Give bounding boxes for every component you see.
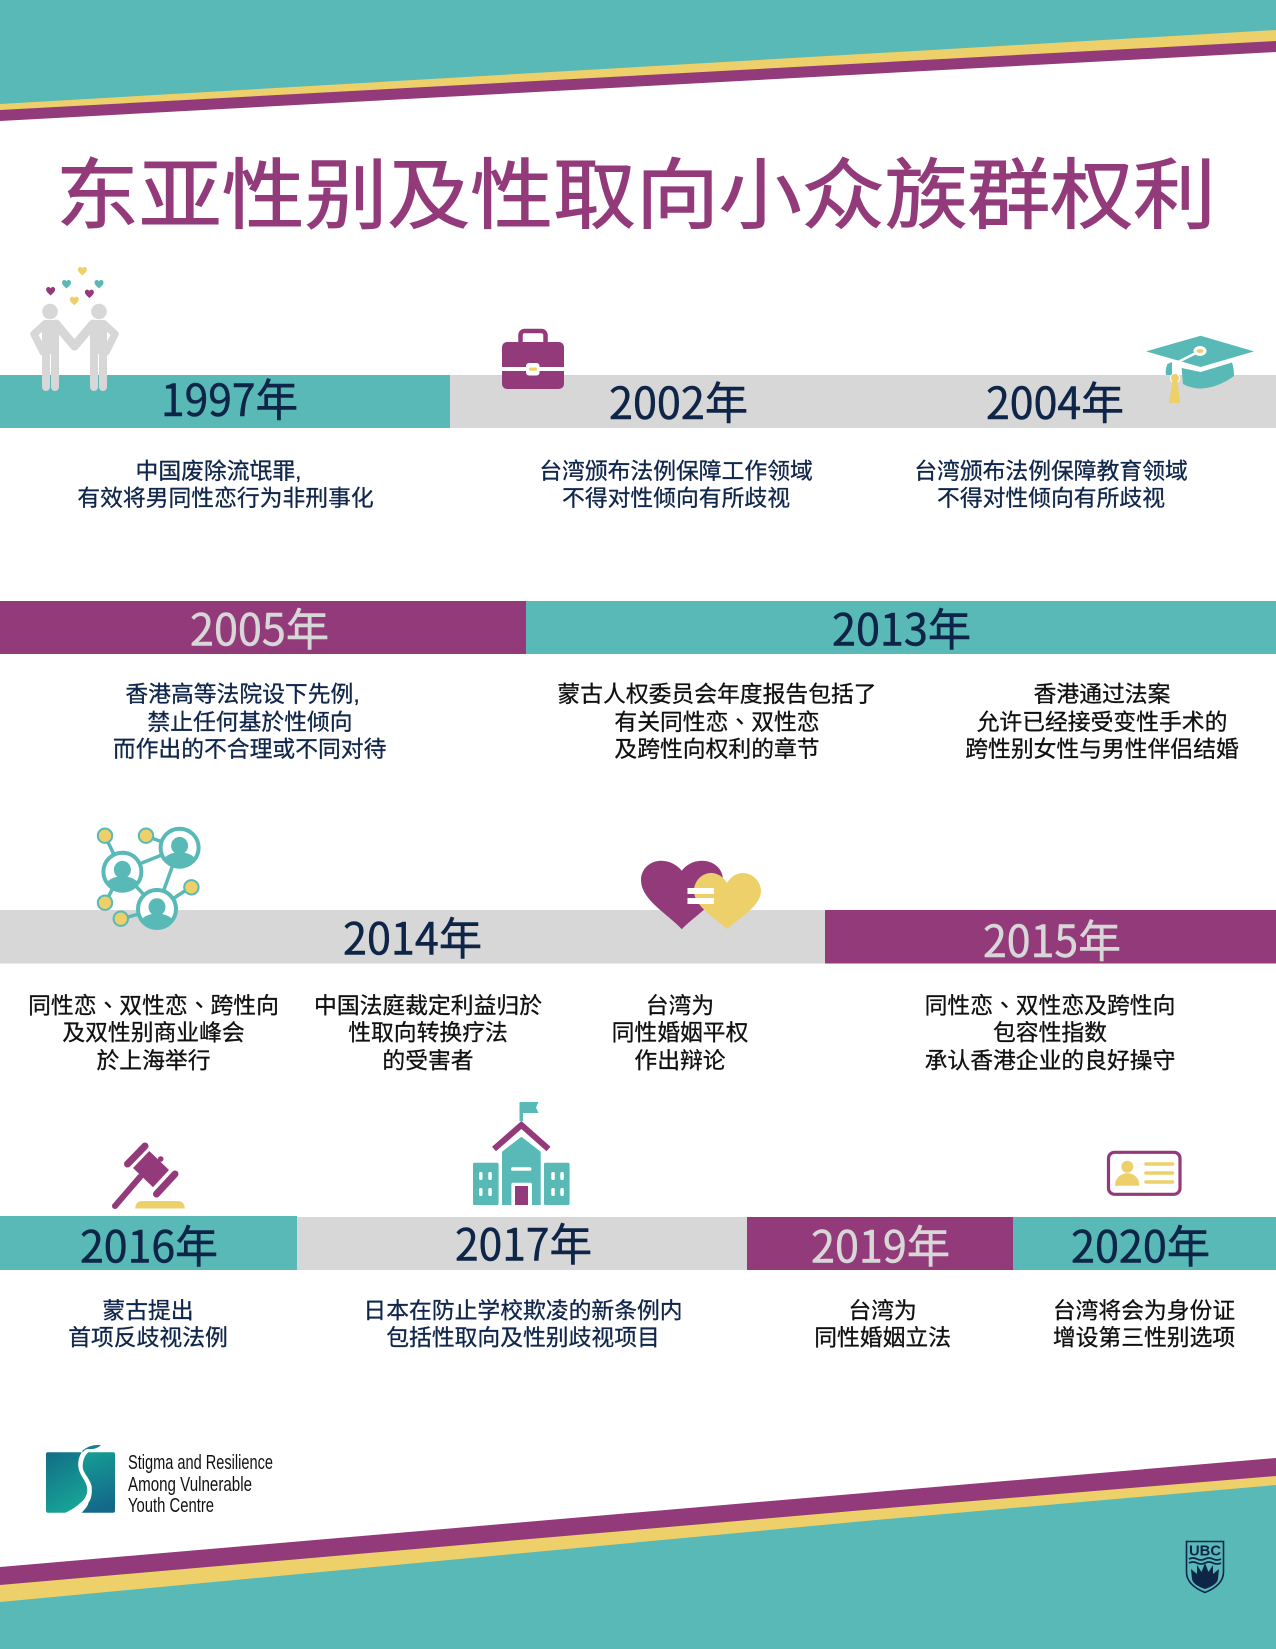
logo text: centre name: Youth Centre [128, 1495, 214, 1517]
year: 2015: 2015年 [983, 905, 1121, 970]
year: 2004: 2004年 [986, 367, 1124, 432]
text: 1997 event: 中国废除流氓罪, [136, 458, 301, 484]
text: 1997 event: 有效将男同性恋行为非刑事化 [77, 485, 374, 511]
year: 2016: 2016年 [80, 1210, 218, 1276]
text: 1997 event [77, 458, 374, 511]
text: 2013 Mongolia event: 及跨性向权利的章节 [614, 736, 820, 762]
logo: Stigma and Resilience mark [46, 1445, 115, 1513]
text: 2016 event: 首项反歧视法例 [68, 1324, 228, 1350]
text: 2014 Taiwan event: 同性婚姻平权 [612, 1020, 749, 1046]
text: 2004 event [914, 458, 1188, 511]
text: 2016 event: 蒙古提出 [102, 1298, 194, 1324]
text: 2002 event [539, 458, 813, 511]
text: 2015 event: 承认香港企业的良好操守 [925, 1048, 1175, 1074]
text: 2017 event: 包括性取向及性别歧视项目 [386, 1324, 660, 1350]
text: 2014 summit event [28, 988, 279, 1074]
logo: UBC shield: UBC [1189, 1542, 1221, 1560]
text: 2015 event: 包容性指数 [993, 1020, 1107, 1046]
text: 2017 event [363, 1298, 683, 1350]
text: 2019 event [814, 1298, 951, 1350]
text: 2004 event: 台湾颁布法例保障教育领域 [914, 458, 1188, 484]
text: 2014 Taiwan event: 作出辩论 [634, 1048, 726, 1074]
text: 2015 event [925, 988, 1175, 1074]
text: 2013 Hong Kong event: 香港通过法案 [1034, 681, 1171, 707]
text: 2019 event: 同性婚姻立法 [814, 1324, 951, 1350]
text: 2004 event: 不得对性倾向有所歧视 [937, 485, 1165, 511]
year: 2014: 2014年 [343, 902, 482, 968]
text: 2019 event: 台湾为 [848, 1298, 917, 1324]
logo: UBC shield [1186, 1542, 1224, 1592]
logo text: centre name: Stigma and Resilience [128, 1452, 273, 1474]
text: 2002 event: 不得对性倾向有所歧视 [562, 485, 790, 511]
text: 2014 court event [314, 992, 542, 1074]
text: 2017 event: 日本在防止学校欺凌的新条例内 [363, 1298, 683, 1324]
row 3 bar [0, 910, 1276, 964]
text: 2013 Hong Kong event: 允许已经接受变性手术的 [977, 709, 1227, 735]
text: 2014 Taiwan event [612, 992, 749, 1074]
logo text: centre name [128, 1452, 273, 1517]
text: 2005 event: 禁止任何基於性倾向 [147, 709, 353, 735]
text: 2014 summit event: 及双性别商业峰会 [62, 1020, 245, 1046]
year: 2019: 2019年 [811, 1210, 950, 1276]
row 2 bar [0, 601, 1276, 654]
row 4 bar [0, 1216, 1276, 1270]
year: 2013: 2013年 [832, 594, 971, 658]
top banner [0, 0, 1276, 121]
icon: people network [98, 828, 199, 930]
text: 2020 event: 台湾将会为身份证 [1053, 1298, 1235, 1324]
icon: school building [473, 1102, 570, 1205]
icon: gavel [115, 1146, 185, 1208]
icon: ID card [1108, 1152, 1180, 1194]
text: 2014 court event: 的受害者 [382, 1048, 474, 1074]
text: 2014 summit event: 於上海举行 [97, 1048, 210, 1074]
text: 2013 Mongolia event: 蒙古人权委员会年度报告包括了 [557, 681, 877, 707]
text: 2005 event: 而作出的不合理或不同对待 [113, 736, 386, 762]
text: 2014 court event: 中国法庭裁定利益归於 [314, 992, 542, 1018]
year: 1997: 1997年 [161, 364, 298, 429]
year: 2002: 2002年 [609, 367, 748, 432]
text: 2014 court event: 性取向转换疗法 [348, 1020, 508, 1046]
icon: two hearts with equals sign [641, 861, 761, 929]
text: 2020 event: 增设第三性别选项 [1053, 1324, 1235, 1350]
text: 2013 Hong Kong event [965, 681, 1239, 762]
row 1 bar [0, 375, 1276, 428]
text: 2002 event: 台湾颁布法例保障工作领域 [539, 458, 813, 484]
bottom banner [0, 1458, 1276, 1649]
year: 2005: 2005年 [190, 594, 329, 658]
icon: graduation cap [1146, 336, 1254, 403]
text: 2014 summit event: 同性恋、双性恋、跨性向 [28, 988, 279, 1020]
text: 2005 event: 香港高等法院设下先例, [125, 681, 360, 707]
year: 2020: 2020年 [1071, 1210, 1210, 1276]
year: 2017: 2017年 [455, 1208, 592, 1274]
text: 2016 event [68, 1298, 228, 1350]
text: 2005 event [113, 681, 386, 762]
text: 2013 Hong Kong event: 跨性别女性与男性伴侣结婚 [965, 736, 1239, 762]
text: 2020 event [1053, 1298, 1235, 1350]
icon: briefcase [502, 331, 564, 389]
text: 2014 Taiwan event: 台湾为 [646, 992, 714, 1018]
title: 东亚性别及性取向小众族群权利 [56, 134, 1216, 246]
logo text: centre name: Among Vulnerable [128, 1474, 252, 1496]
icon: couple with hearts [34, 267, 115, 391]
text: 2013 Mongolia event [557, 681, 877, 762]
text: 2015 event: 同性恋、双性恋及跨性向 [925, 988, 1175, 1020]
text: 2013 Mongolia event: 有关同性恋、双性恋 [614, 704, 820, 737]
